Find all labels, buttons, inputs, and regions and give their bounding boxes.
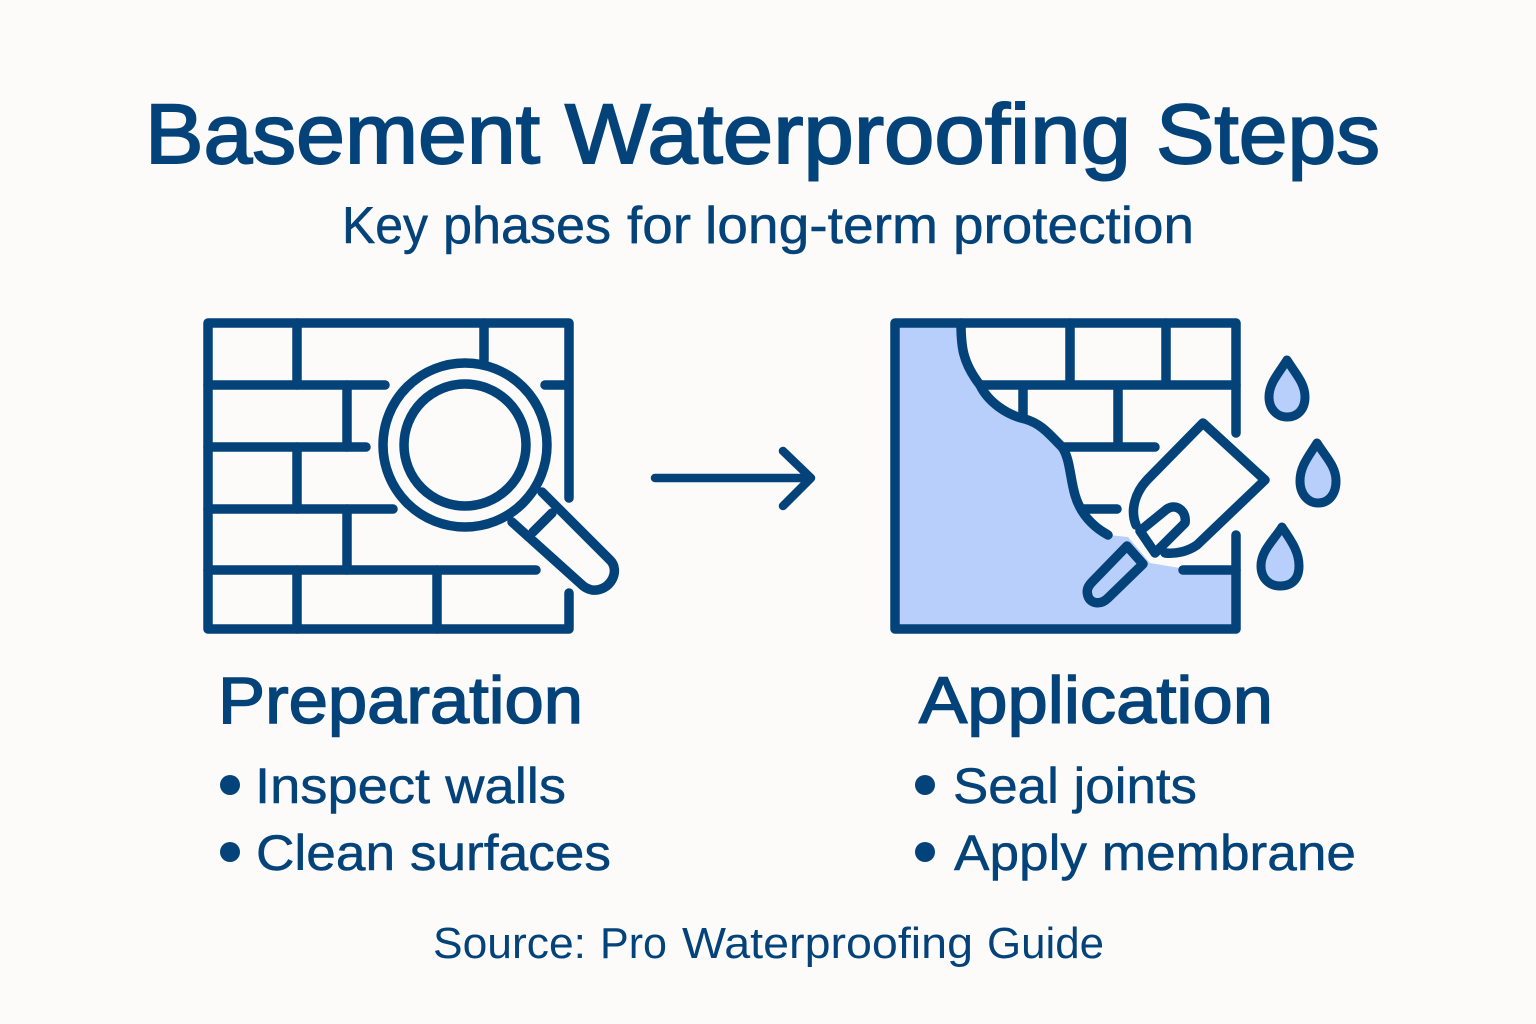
water drops — [1261, 360, 1336, 586]
panel: preparation — [208, 323, 614, 881]
panel: application — [895, 323, 1356, 881]
membrane fill — [898, 326, 1234, 627]
preparation list — [220, 758, 611, 881]
title: Steps — [1156, 87, 1380, 181]
application list — [915, 758, 1356, 881]
source note: Guide — [987, 919, 1104, 968]
trowel — [1087, 423, 1265, 603]
source note: Waterproofing — [682, 919, 973, 968]
title: Waterproofing — [565, 87, 1131, 181]
subtitle: Key — [342, 197, 428, 255]
source note: Pro — [600, 919, 667, 968]
subtitle: for — [627, 197, 691, 255]
brick lines — [895, 323, 1236, 629]
arrow — [655, 451, 811, 506]
subtitle: phases — [443, 197, 611, 255]
application list: Apply membrane — [954, 825, 1356, 881]
subtitle: long-term — [705, 197, 938, 255]
heading: application: Application — [919, 663, 1273, 737]
source note: Source: — [433, 919, 586, 968]
application list: Seal joints — [953, 758, 1197, 814]
icon: brick wall with magnifying glass — [208, 323, 614, 629]
magnifying glass — [383, 363, 614, 590]
title: Basement — [145, 87, 540, 181]
heading: preparation: Preparation — [218, 663, 583, 737]
preparation list: Inspect walls — [255, 758, 566, 814]
brick wall — [208, 323, 569, 629]
subtitle: protection — [953, 197, 1194, 255]
preparation list: Clean surfaces — [256, 825, 611, 881]
icon: trowel applying membrane to brick wall — [895, 323, 1336, 629]
